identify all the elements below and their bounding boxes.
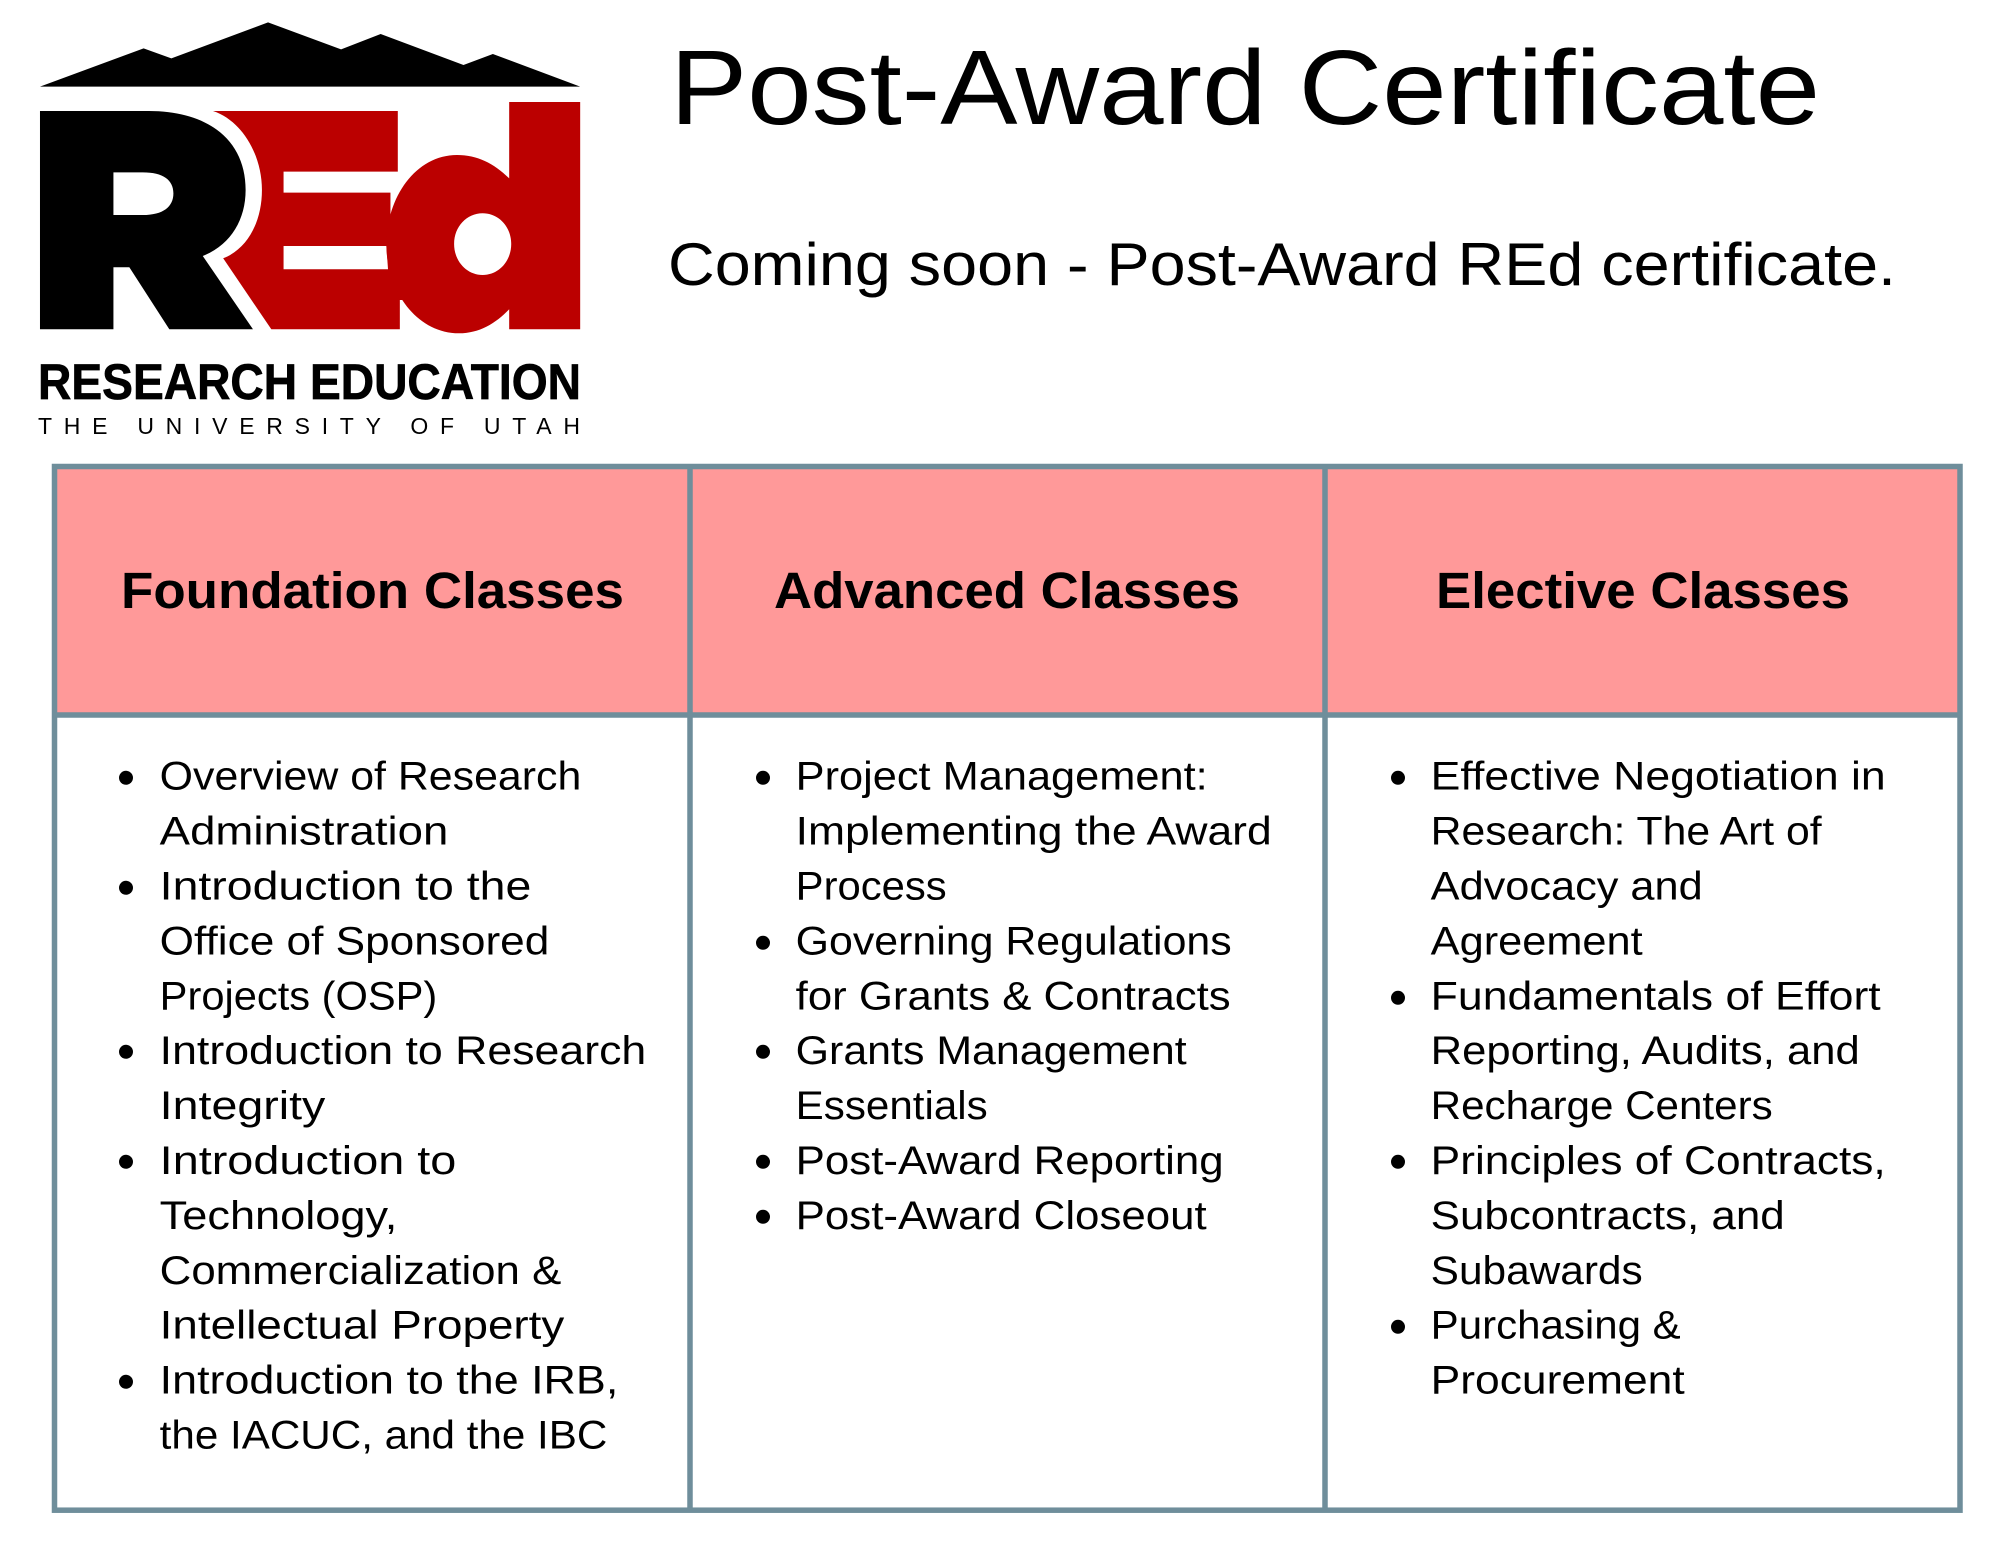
logo tagline: THE UNIVERSITY OF UTAH <box>38 413 580 439</box>
table <box>54 466 1960 1510</box>
list: advanced classes: Grants Management <box>796 1029 1187 1073</box>
heading: Foundation Classes: Foundation Classes <box>121 562 624 619</box>
list: foundation classes: Technology, <box>160 1194 397 1238</box>
list: elective classes: Subawards <box>1431 1249 1643 1293</box>
list: foundation classes: Introduction to the <box>160 865 531 909</box>
list: foundation classes: Commercialization & <box>160 1249 562 1293</box>
list: elective classes: Research: The Art of <box>1431 810 1823 854</box>
list: elective classes: Reporting, Audits, and <box>1431 1029 1860 1073</box>
list: foundation classes: Introduction to the IRB, <box>160 1359 618 1403</box>
list: advanced classes: Essentials <box>796 1084 988 1128</box>
list: advanced classes: Post-Award Closeout <box>796 1194 1207 1238</box>
heading: Elective Classes: Elective Classes <box>1436 562 1850 619</box>
list: advanced classes: Process <box>796 865 947 909</box>
logo: Research Education, University of Utah <box>38 22 581 439</box>
logo letter E in red <box>213 111 408 329</box>
list: elective classes: Agreement <box>1431 919 1643 963</box>
list: elective classes: Fundamentals of Effort <box>1431 974 1881 1018</box>
table header background <box>54 466 1960 715</box>
list: elective classes <box>1391 755 1886 1403</box>
list: foundation classes: Introduction to Research <box>160 1029 646 1073</box>
list: foundation classes: Administration <box>160 810 448 854</box>
list: advanced classes: Project Management: <box>796 755 1208 799</box>
table frame <box>54 466 1960 1510</box>
title: Post-Award Certificate <box>670 29 1820 147</box>
list: advanced classes: Governing Regulations <box>796 919 1232 963</box>
list: elective classes: Advocacy and <box>1431 865 1703 909</box>
logo letter d in red <box>386 102 580 333</box>
list: elective classes: Recharge Centers <box>1431 1084 1773 1128</box>
heading: Advanced Classes: Advanced Classes <box>774 562 1240 619</box>
list: advanced classes: Implementing the Award <box>796 810 1272 854</box>
list: foundation classes: Overview of Research <box>160 755 581 799</box>
list: foundation classes <box>119 755 646 1458</box>
list: foundation classes: Integrity <box>160 1084 325 1128</box>
list: foundation classes: Introduction to <box>160 1139 456 1183</box>
list: elective classes: Subcontracts, and <box>1431 1194 1785 1238</box>
list: elective classes: Principles of Contracts, <box>1431 1139 1886 1183</box>
list: advanced classes: for Grants & Contracts <box>796 974 1231 1018</box>
list: foundation classes: Intellectual Property <box>160 1304 564 1348</box>
logo wordmark: RESEARCH EDUCATION <box>38 354 581 410</box>
list: foundation classes: Office of Sponsored <box>160 919 549 963</box>
list: foundation classes: Projects (OSP) <box>160 974 437 1018</box>
list: elective classes: Procurement <box>1431 1359 1685 1403</box>
subtitle: Coming soon - Post-Award REd certificate. <box>668 231 1896 298</box>
logo letter R in black <box>40 111 253 329</box>
list: advanced classes <box>756 755 1272 1238</box>
list: foundation classes: the IACUC, and the IBC <box>160 1413 607 1457</box>
list: advanced classes: Post-Award Reporting <box>796 1139 1224 1183</box>
list: elective classes: Effective Negotiation in <box>1431 755 1886 799</box>
list: elective classes: Purchasing & <box>1431 1304 1681 1348</box>
icon: mountain range <box>40 22 580 87</box>
